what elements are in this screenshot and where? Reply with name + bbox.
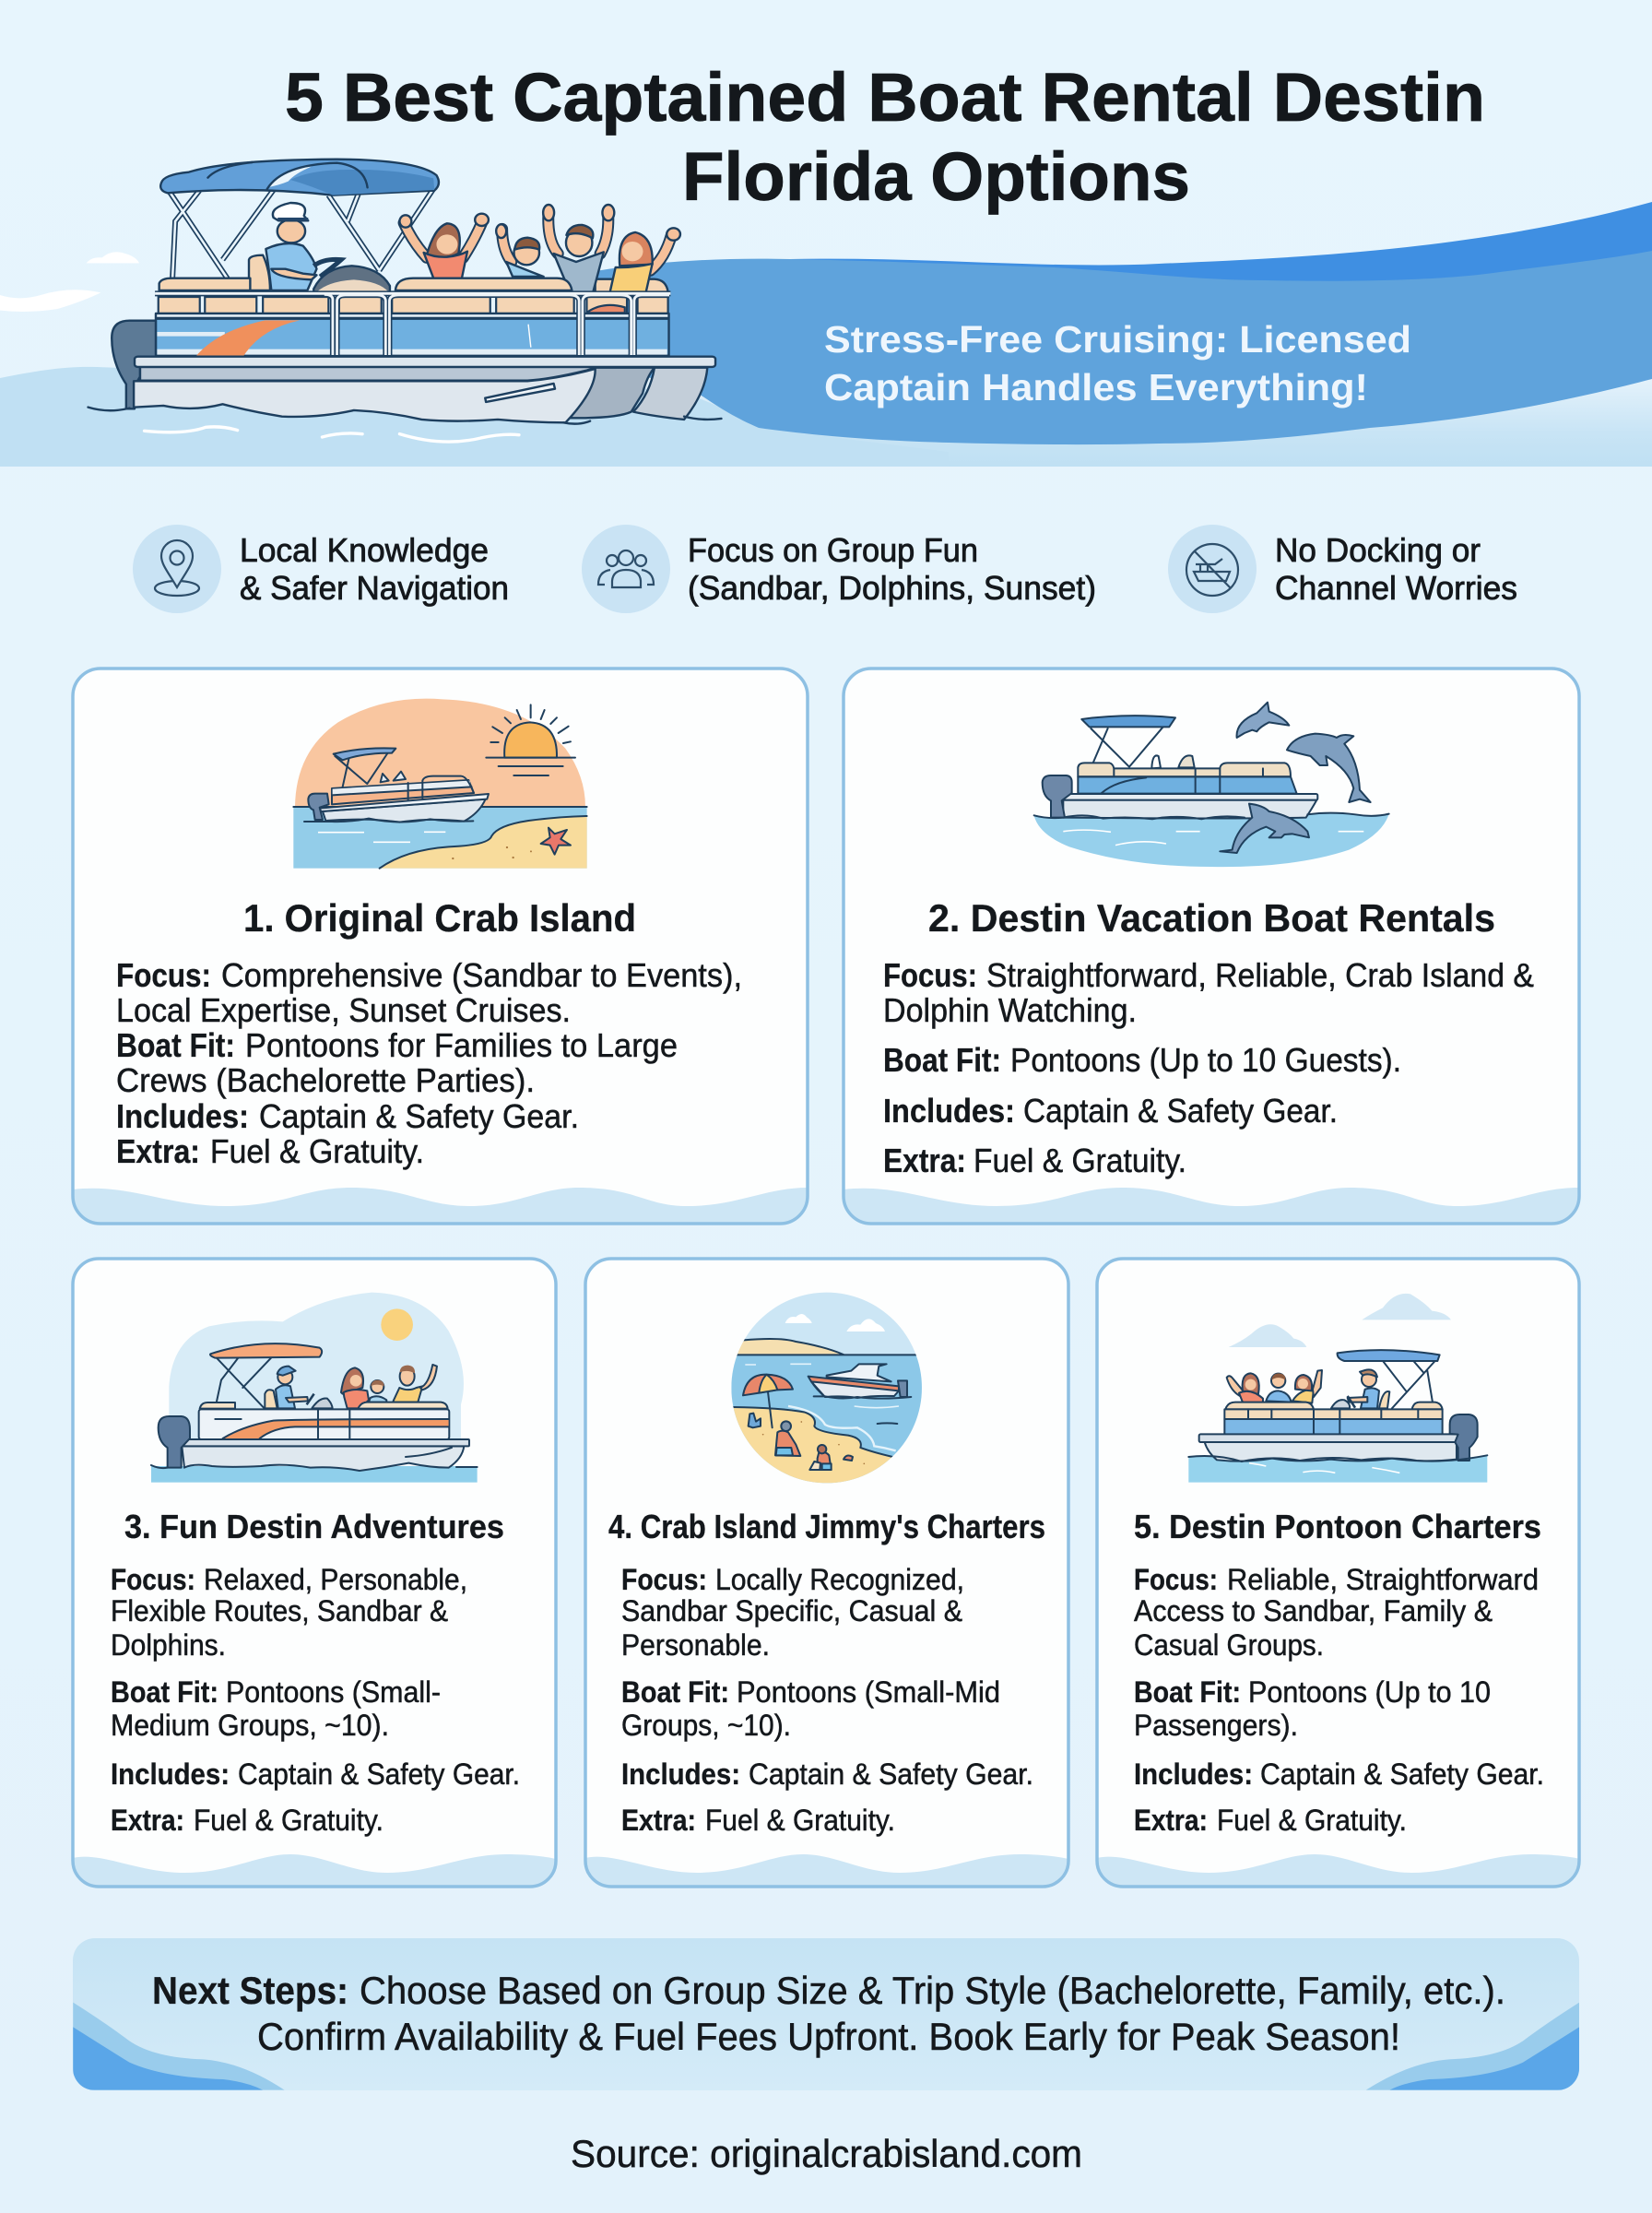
panel: 2. Destin Vacation Boat Rentals bbox=[844, 669, 1579, 1224]
illustration: family on pontoon bbox=[151, 1293, 478, 1483]
card background bbox=[73, 1259, 556, 1887]
card details: Groups, ~10). bbox=[621, 1709, 791, 1742]
person sitting bbox=[775, 1421, 800, 1456]
card details: Reliable, Straightforward bbox=[1227, 1563, 1539, 1596]
sea bbox=[151, 1466, 478, 1483]
illustration: boat at sunset bbox=[293, 699, 587, 869]
hull bbox=[1205, 1442, 1457, 1462]
banner corner waves bbox=[73, 2003, 1579, 2090]
deck bbox=[135, 357, 715, 367]
main pontoon bbox=[134, 367, 597, 422]
shoreline bbox=[380, 816, 587, 869]
card details: Captain & Safety Gear. bbox=[1023, 1092, 1338, 1130]
card details: Focus: bbox=[1134, 1563, 1218, 1596]
card border bbox=[585, 1259, 1068, 1887]
chair bbox=[749, 1414, 761, 1427]
card background bbox=[1097, 1259, 1579, 1887]
passengers bbox=[399, 205, 680, 292]
sun bbox=[381, 1308, 413, 1341]
sand dots bbox=[452, 846, 532, 859]
subtitle bbox=[824, 318, 1411, 408]
card details bbox=[621, 1563, 1033, 1837]
hull bbox=[182, 1446, 464, 1471]
sky dome bbox=[295, 699, 585, 807]
blue side panels bbox=[156, 314, 669, 356]
card details: Includes: bbox=[621, 1757, 740, 1791]
card details: Local Expertise, Sunset Cruises. bbox=[116, 991, 571, 1029]
illustration: boat with dolphins bbox=[1034, 703, 1389, 867]
benefits row bbox=[133, 525, 1517, 613]
dolphin: top bbox=[1237, 703, 1289, 738]
card details: Includes: bbox=[116, 1097, 249, 1135]
banner background bbox=[73, 1938, 1579, 2090]
dolphin: jumping bbox=[1220, 804, 1309, 853]
card details: Boat Fit: bbox=[111, 1675, 218, 1709]
panel: 3. Fun Destin Adventures bbox=[73, 1259, 556, 1887]
waterline bbox=[1188, 1455, 1487, 1462]
hero banner bbox=[0, 59, 1652, 467]
card details: Focus: bbox=[621, 1563, 707, 1596]
card wave bbox=[585, 1854, 1068, 1887]
next steps banner bbox=[73, 1938, 1579, 2090]
details bbox=[151, 1448, 478, 1468]
waterline bbox=[1034, 813, 1389, 819]
card details: Boat Fit: bbox=[621, 1675, 729, 1709]
card details: Captain & Safety Gear. bbox=[749, 1757, 1033, 1791]
starfish bbox=[541, 828, 571, 855]
card details: Medium Groups, ~10). bbox=[111, 1709, 389, 1742]
card details: Focus: bbox=[116, 956, 211, 994]
card details: Boat Fit: bbox=[1134, 1675, 1241, 1709]
banner text: Next Steps: bbox=[152, 1969, 348, 2012]
benefit text: (Sandbar, Dolphins, Sunset) bbox=[688, 569, 1096, 607]
outboard motor bbox=[112, 321, 156, 408]
card details: Boat Fit: bbox=[116, 1026, 235, 1064]
clouds bbox=[1229, 1294, 1451, 1347]
panel: 4. Crab Island Jimmy's Charters bbox=[585, 1259, 1068, 1887]
benefit 1: local knowledge bbox=[133, 525, 509, 613]
stripes bbox=[215, 1409, 449, 1439]
child bbox=[809, 1445, 832, 1470]
card details: Fuel & Gratuity. bbox=[974, 1142, 1186, 1179]
captain bbox=[249, 203, 341, 290]
seat backs bbox=[159, 278, 668, 292]
banner text: Choose Based on Group Size & Trip Style (Bachelorette, Family, etc.). bbox=[360, 1969, 1505, 2012]
card details bbox=[883, 956, 1534, 1179]
hero pontoon boat illustration bbox=[0, 160, 721, 442]
card border bbox=[844, 669, 1579, 1224]
card title: 1. Original Crab Island bbox=[243, 896, 636, 940]
motor bbox=[159, 1416, 190, 1468]
card background bbox=[73, 669, 808, 1224]
card details bbox=[116, 956, 742, 1170]
rear pontoons bbox=[570, 368, 707, 420]
card details: Includes: bbox=[1134, 1757, 1253, 1791]
card details: Boat Fit: bbox=[883, 1041, 1001, 1079]
canopy bbox=[160, 160, 439, 195]
deck bbox=[181, 1439, 469, 1446]
seating bbox=[1224, 1402, 1443, 1435]
card details: Flexible Routes, Sandbar & bbox=[111, 1594, 448, 1627]
card details: Captain & Safety Gear. bbox=[259, 1097, 579, 1135]
beach bbox=[380, 816, 587, 869]
card details: Personable. bbox=[621, 1628, 770, 1662]
sea bbox=[1034, 813, 1389, 867]
benefit text: Focus on Group Fun bbox=[688, 531, 978, 569]
banner text: Confirm Availability & Fuel Fees Upfront. Book Early for Peak Season! bbox=[257, 2015, 1400, 2058]
card details: Extra: bbox=[1134, 1804, 1208, 1837]
card details: Passengers). bbox=[1134, 1709, 1298, 1742]
card details: Includes: bbox=[883, 1092, 1015, 1130]
left water bbox=[0, 367, 949, 467]
captain bbox=[265, 1367, 333, 1408]
benefit text: Local Knowledge bbox=[240, 531, 489, 569]
horizon bbox=[293, 806, 587, 808]
card details: Fuel & Gratuity. bbox=[210, 1132, 424, 1170]
benefit text: No Docking or bbox=[1275, 531, 1481, 569]
clouds bbox=[0, 252, 139, 312]
passengers bbox=[1227, 1370, 1322, 1403]
card details: Dolphins. bbox=[111, 1628, 226, 1662]
boat bbox=[304, 748, 489, 822]
highlights bbox=[318, 832, 445, 842]
card details: Straightforward, Reliable, Crab Island & bbox=[986, 956, 1534, 994]
hero title bbox=[285, 59, 1485, 215]
card details bbox=[111, 1563, 520, 1837]
card details: Includes: bbox=[111, 1757, 230, 1791]
card details: Casual Groups. bbox=[1134, 1628, 1324, 1662]
card details: Fuel & Gratuity. bbox=[705, 1804, 895, 1837]
canopy bbox=[210, 1343, 322, 1408]
benefit text bbox=[240, 531, 509, 607]
passengers bbox=[341, 1365, 448, 1409]
illustration: pontoon with clouds bbox=[1188, 1294, 1487, 1483]
card details: Pontoons (Small-Mid bbox=[737, 1675, 1000, 1709]
card details: Pontoons (Up to 10 Guests). bbox=[1010, 1041, 1401, 1079]
water highlights bbox=[145, 427, 519, 442]
canopy frame bbox=[170, 178, 434, 290]
scene circle bbox=[728, 1291, 922, 1487]
boat bbox=[808, 1364, 911, 1399]
center bench bbox=[395, 278, 572, 290]
subtitle: Stress-Free Cruising: Licensed bbox=[824, 318, 1411, 361]
motor bbox=[1450, 1414, 1478, 1461]
card details: Captain & Safety Gear. bbox=[1260, 1757, 1544, 1791]
highlights bbox=[1249, 1463, 1399, 1473]
card details: Sandbar Specific, Casual & bbox=[621, 1594, 962, 1627]
deck bbox=[1199, 1434, 1457, 1442]
card border bbox=[1097, 1259, 1579, 1887]
card details: Comprehensive (Sandbar to Events), bbox=[221, 956, 742, 994]
card title: 2. Destin Vacation Boat Rentals bbox=[928, 896, 1495, 940]
card title: 4. Crab Island Jimmy's Charters bbox=[608, 1508, 1045, 1545]
card title: 3. Fun Destin Adventures bbox=[124, 1508, 504, 1545]
card wave bbox=[73, 1188, 808, 1224]
icon: group of people bbox=[582, 525, 670, 613]
benefit 2: group fun bbox=[582, 525, 1096, 613]
console bbox=[313, 266, 390, 293]
hull body bbox=[199, 1402, 449, 1439]
card details: Extra: bbox=[111, 1804, 184, 1837]
card border bbox=[73, 1259, 556, 1887]
panel: 5. Destin Pontoon Charters bbox=[1097, 1259, 1580, 1887]
highlights bbox=[1063, 830, 1363, 846]
sea bbox=[293, 807, 587, 869]
card background bbox=[585, 1259, 1068, 1887]
icon: map pin bbox=[133, 525, 221, 613]
card details: Locally Recognized, bbox=[715, 1563, 964, 1596]
card details: Pontoons for Families to Large bbox=[245, 1026, 678, 1064]
card details: Dolphin Watching. bbox=[883, 991, 1137, 1029]
icon: crossed-out boat bbox=[1168, 525, 1257, 613]
card details: Fuel & Gratuity. bbox=[194, 1804, 384, 1837]
medium blue wave bbox=[590, 251, 1652, 444]
card details: Pontoons (Small- bbox=[226, 1675, 441, 1709]
card details: Fuel & Gratuity. bbox=[1217, 1804, 1407, 1837]
sky blob bbox=[169, 1293, 464, 1441]
lower cushions bbox=[159, 297, 668, 314]
card details: Extra: bbox=[883, 1142, 966, 1179]
dolphin: right bbox=[1287, 734, 1371, 802]
banner text bbox=[152, 1969, 1505, 2058]
panel: 1. Original Crab Island bbox=[73, 669, 808, 1224]
captain bbox=[1331, 1369, 1389, 1408]
card wave bbox=[73, 1854, 556, 1887]
card details: Pontoons (Up to 10 bbox=[1248, 1675, 1491, 1709]
card details: Focus: bbox=[883, 956, 977, 994]
hero title: Florida Options bbox=[682, 138, 1190, 215]
card details bbox=[1134, 1563, 1544, 1837]
dark blue wave bbox=[790, 202, 1652, 295]
card details: Extra: bbox=[621, 1804, 696, 1837]
card details: Access to Sandbar, Family & bbox=[1134, 1594, 1493, 1627]
card background bbox=[844, 669, 1579, 1224]
benefit text: & Safer Navigation bbox=[240, 569, 509, 607]
source line: Source: originalcrabisland.com bbox=[571, 2132, 1082, 2175]
card details: Focus: bbox=[111, 1563, 195, 1596]
subtitle: Captain Handles Everything! bbox=[824, 366, 1368, 408]
sun bbox=[486, 704, 575, 775]
card title: 5. Destin Pontoon Charters bbox=[1134, 1508, 1541, 1545]
benefit text bbox=[688, 531, 1096, 607]
illustration: beach scene bbox=[728, 1291, 922, 1487]
shell and specks bbox=[762, 1421, 897, 1464]
boat bbox=[1043, 716, 1317, 818]
card details: Relaxed, Personable, bbox=[204, 1563, 467, 1596]
benefit text: Channel Worries bbox=[1275, 569, 1517, 607]
sea bbox=[1188, 1455, 1487, 1483]
card border bbox=[73, 669, 808, 1224]
card details: Captain & Safety Gear. bbox=[238, 1757, 520, 1791]
umbrella bbox=[743, 1375, 793, 1427]
card wave bbox=[844, 1188, 1578, 1224]
railings bbox=[155, 293, 670, 355]
hero title: 5 Best Captained Boat Rental Destin bbox=[285, 59, 1485, 136]
card wave bbox=[1097, 1854, 1580, 1887]
benefit 3: no docking bbox=[1168, 525, 1517, 613]
waterline bbox=[88, 408, 721, 424]
benefit text bbox=[1275, 531, 1517, 607]
light water band bbox=[0, 379, 1652, 467]
canopy bbox=[1338, 1350, 1440, 1408]
card details: Extra: bbox=[116, 1132, 200, 1170]
card details: Crews (Bachelorette Parties). bbox=[116, 1061, 535, 1099]
